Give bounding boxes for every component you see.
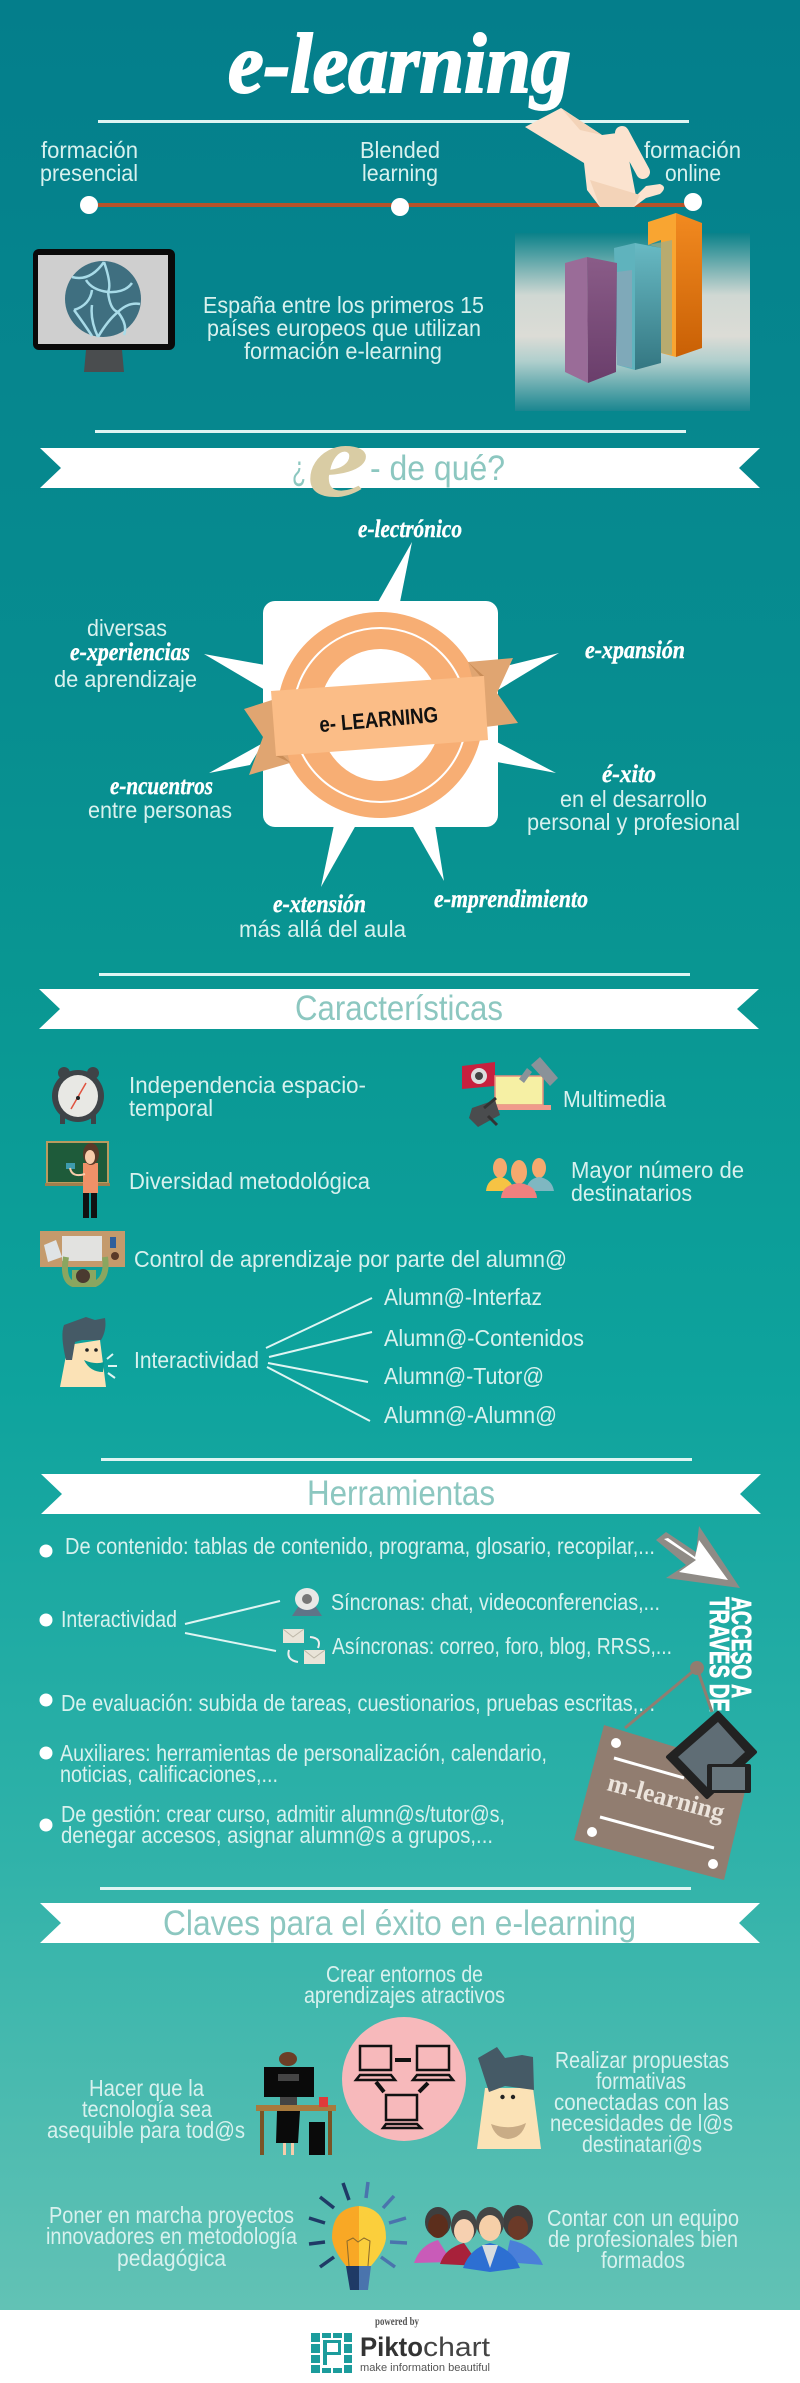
bullet: interactividad: Asíncronas: correo, foro, blog, RRSS,... — [332, 1633, 672, 1659]
panel: claves — [46, 1961, 739, 2290]
bullet: de gestión: De gestión: crear curso, admitir alumn@s/tutor@s, — [61, 1801, 505, 1827]
label: diversas e-xperiencias: diversas — [87, 615, 167, 641]
timeline point: formación presencial: presencial — [40, 160, 138, 186]
bullet: de contenido: De contenido: tablas de contenido, programa, glosario, recopilar,... — [65, 1533, 655, 1559]
bullet: auxiliares: noticias, calificaciones,... — [60, 1761, 278, 1787]
footer: Piktochart credit: powered by — [375, 2314, 419, 2328]
icon: smiling man — [477, 2047, 541, 2149]
ribbon with e-learning label: e- LEARNING — [318, 702, 439, 737]
label: é-xito: é-xito — [602, 761, 656, 788]
logo mark — [311, 2333, 352, 2373]
banner: Herramientas — [41, 1474, 761, 1514]
bullet: de evaluación: De evaluación: subida de tareas, cuestionarios, pruebas escritas,... — [61, 1690, 655, 1716]
text: Spain among the top 15: formación e-learning — [244, 338, 442, 364]
icon: group of people — [486, 1158, 554, 1198]
key: propuestas conectadas: destinatari@s — [582, 2131, 702, 2157]
timeline point: formación presencial: formación — [41, 137, 138, 163]
label: e-ncuentros — [88, 773, 232, 823]
item: mayor número de destinatarios — [486, 1157, 744, 1206]
key: tecnología asequible — [47, 2052, 336, 2155]
key: equipo de profesionales: Contar con un equipo — [547, 2205, 739, 2231]
panel: características — [40, 1057, 744, 1428]
key: tecnología asequible: Hacer que la — [89, 2075, 204, 2101]
key: crear entornos: aprendizajes atractivos — [304, 1982, 505, 2008]
label: e-ncuentros: e-ncuentros — [110, 773, 213, 800]
icon: decorative letter e: e — [307, 402, 369, 519]
item: interactividad — [60, 1284, 584, 1428]
timeline point: formación presencial — [40, 137, 138, 214]
vertical text: acceso a través de: TRAVÉS DE — [704, 1597, 735, 1712]
icon: pink circle with networked laptops — [342, 2017, 466, 2141]
icon: cursor arrow — [656, 1526, 740, 1588]
label: diversas e-xperiencias: de aprendizaje — [54, 666, 197, 692]
key: propuestas conectadas: necesidades de l@s — [550, 2110, 733, 2136]
banner: e- de qué: ¿ — [292, 449, 306, 488]
key: propuestas conectadas: conectadas con las — [554, 2089, 729, 2115]
icon: tablet and phone — [668, 1713, 755, 1797]
banner: Características — [39, 989, 759, 1029]
banner: Herramientas: Herramientas — [307, 1474, 495, 1513]
timeline point: formación online: formación — [644, 137, 741, 163]
bullet: auxiliares — [40, 1740, 547, 1787]
item: interactividad: Interactividad — [134, 1347, 259, 1373]
key: propuestas conectadas — [477, 2047, 733, 2157]
text: Spain among the top 15 — [203, 292, 484, 364]
banner: Claves para el éxito en e-learning: Claves para el éxito en e-learning — [163, 1904, 636, 1943]
icon: team of professionals — [414, 2205, 543, 2272]
icon: webcam — [292, 1588, 322, 1616]
item: diversidad metodológica — [45, 1142, 370, 1218]
bullet: de gestión — [40, 1801, 505, 1848]
key: proyectos innovadores — [46, 2182, 407, 2290]
ring emblem — [277, 612, 483, 818]
timeline: from classroom to online training — [40, 137, 741, 216]
panel: herramientas — [40, 1533, 672, 1848]
vertical text: acceso a través de: ACCESO A — [726, 1597, 757, 1698]
bar chart image — [515, 213, 750, 411]
ribbon with e-learning label — [244, 658, 518, 775]
item: diversidad metodológica: Diversidad metodológica — [129, 1168, 370, 1194]
footer: Piktochart credit — [0, 2310, 800, 2383]
timeline point: formación online — [644, 137, 741, 211]
item: mayor número de destinatarios: destinatarios — [571, 1180, 692, 1206]
label: e-xtensión: e-xtensión — [273, 891, 366, 918]
key: propuestas conectadas: Realizar propuestas — [555, 2047, 729, 2073]
label: e-xtensión: más allá del aula — [239, 916, 406, 942]
item: control de aprendizaje: Control de aprendizaje por parte del alumn@ — [134, 1246, 567, 1272]
sign: m-learning: m-learning — [604, 1768, 728, 1827]
item: interactividad: Alumn@-Contenidos — [384, 1325, 584, 1351]
key: proyectos innovadores: Poner en marcha proyectos — [49, 2202, 294, 2228]
key: equipo de profesionales: de profesionales bien — [548, 2226, 738, 2252]
label: e-ncuentros: entre personas — [88, 797, 232, 823]
icon: woman at computer — [256, 2052, 336, 2155]
footer: Piktochart credit: make information beautiful — [360, 2362, 490, 2374]
icon: speaking man — [60, 1317, 117, 1387]
key: proyectos innovadores: pedagógica — [117, 2245, 226, 2271]
item: multimedia — [462, 1057, 666, 1127]
star spikes and card — [204, 542, 559, 887]
icon: alarm clock — [52, 1067, 104, 1124]
footer: Piktochart credit: chart — [423, 2332, 491, 2362]
label: diversas e-xperiencias: e-xperiencias — [70, 639, 190, 666]
diagram: e-learning star — [54, 516, 740, 942]
icon: computer monitor with globe — [33, 249, 175, 372]
banner: e- de qué — [40, 402, 760, 519]
icon: teacher at blackboard — [45, 1142, 110, 1218]
vertical text: acceso a través de — [704, 1597, 757, 1712]
item: independencia espacio-temporal — [52, 1067, 366, 1124]
item: independencia espacio-temporal: temporal — [129, 1095, 213, 1121]
key: crear entornos: Crear entornos de — [326, 1961, 483, 1987]
key: proyectos innovadores: innovadores en metodología — [46, 2223, 297, 2249]
key: equipo de profesionales: formados — [601, 2247, 685, 2273]
item: mayor número de destinatarios: Mayor número de — [571, 1157, 744, 1183]
banner: e- de qué: - de qué? — [370, 449, 505, 488]
timeline point: formación online: online — [665, 160, 721, 186]
icon: multimedia devices — [462, 1057, 558, 1127]
item: interactividad: Alumn@-Tutor@ — [384, 1363, 544, 1389]
key: crear entornos — [304, 1961, 505, 2141]
label: diversas e-xperiencias — [54, 615, 197, 692]
text: Spain among the top 15: países europeos que utilizan — [207, 315, 481, 341]
key: propuestas conectadas: formativas — [596, 2068, 686, 2094]
item: control de aprendizaje — [40, 1231, 567, 1285]
bullet: auxiliares: Auxiliares: herramientas de personalización, calendario, — [60, 1740, 547, 1766]
item: interactividad: Alumn@-Alumn@ — [384, 1402, 557, 1428]
text: Spain among the top 15: España entre los primeros 15 — [203, 292, 484, 318]
label: e-xtensión — [239, 891, 406, 942]
timeline point: blended learning: learning — [362, 160, 438, 186]
title: e-learning — [228, 17, 571, 111]
sign: m-learning — [574, 1661, 750, 1880]
icon: light bulb — [309, 2182, 407, 2290]
key: tecnología asequible: asequible para tod@s — [47, 2117, 245, 2143]
bullet: de gestión: denegar accesos, asignar alumn@s a grupos,... — [61, 1822, 493, 1848]
banner: Características: Características — [295, 989, 503, 1028]
footer: Piktochart credit: Pikto — [360, 2332, 423, 2362]
label: é-xito: en el desarrollo — [560, 786, 707, 812]
key: tecnología asequible: tecnología sea — [82, 2096, 212, 2122]
label: é-xito — [527, 761, 740, 835]
bullet: interactividad — [40, 1588, 672, 1664]
bullet: interactividad: Síncronas: chat, videoconferencias,... — [331, 1589, 660, 1615]
icon: exchange of mail — [283, 1629, 325, 1664]
bullet: interactividad: Interactividad — [61, 1606, 177, 1632]
label: é-xito: personal y profesional — [527, 809, 740, 835]
timeline point: blended learning — [360, 137, 440, 216]
item: independencia espacio-temporal: Independencia espacio- — [129, 1072, 366, 1098]
timeline point: blended learning: Blended — [360, 137, 440, 163]
icon: student at desk from above — [40, 1231, 125, 1285]
label: e-lectrónico: e-lectrónico — [358, 516, 462, 543]
key: equipo de profesionales — [414, 2205, 739, 2273]
branch lines — [266, 1298, 372, 1421]
item: multimedia: Multimedia — [563, 1086, 666, 1112]
item: interactividad: Alumn@-Interfaz — [384, 1284, 542, 1310]
label: e-mprendimiento: e-mprendimiento — [434, 886, 588, 913]
icon: hand sliding the timeline — [525, 108, 664, 207]
label: e-xpansión: e-xpansión — [585, 637, 685, 664]
